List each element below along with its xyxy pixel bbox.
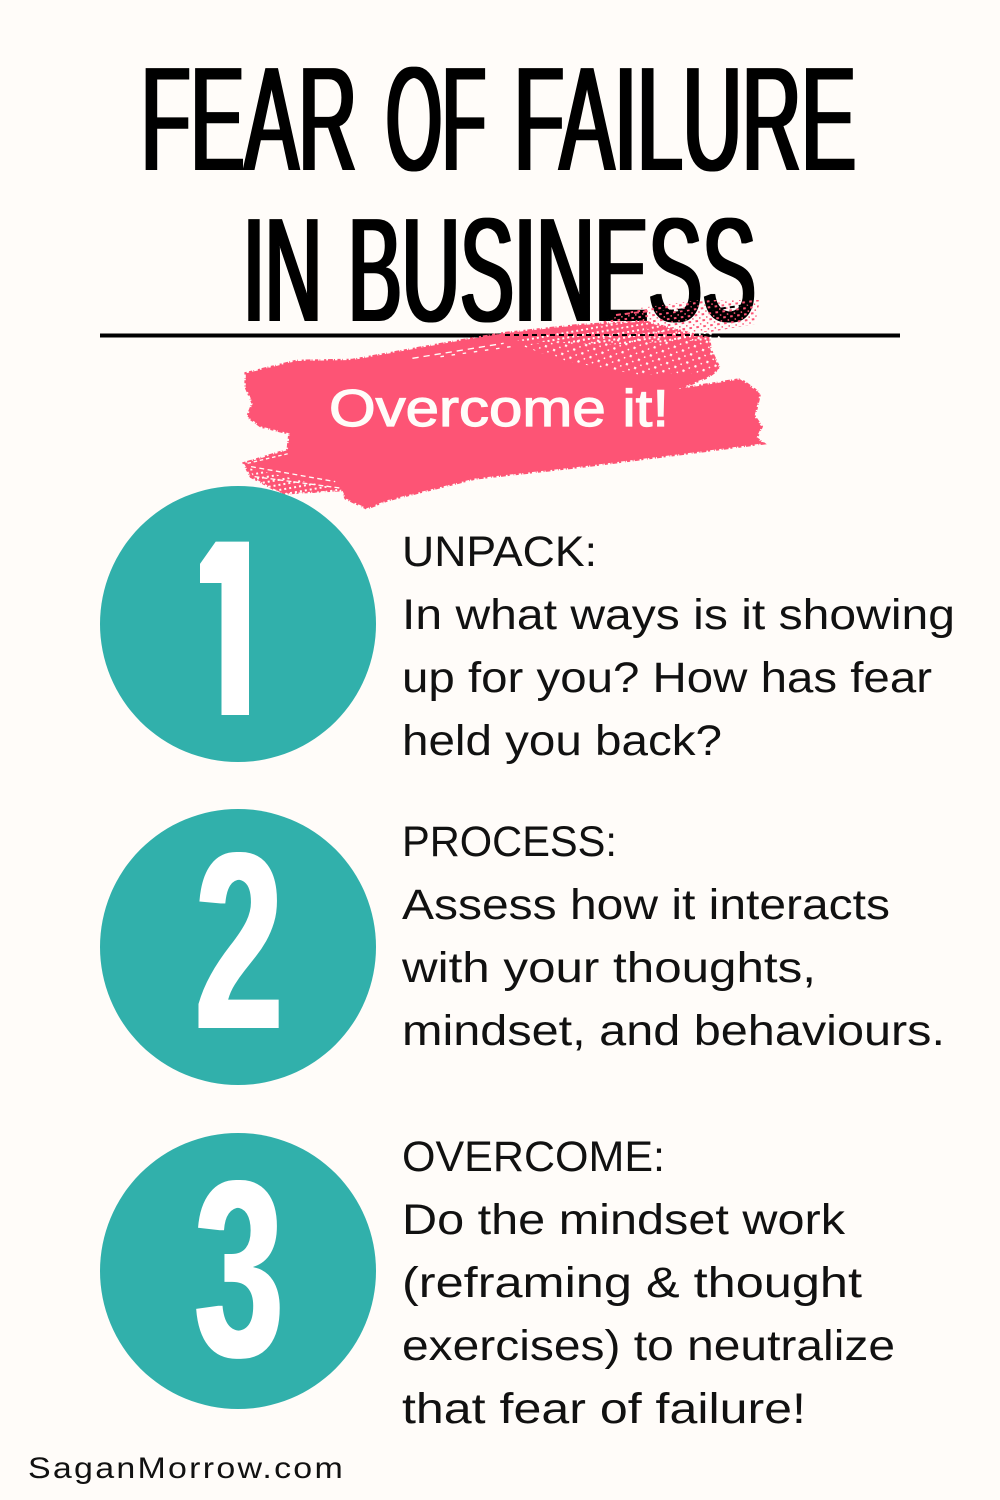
step 2 number circle: 2	[195, 801, 283, 1082]
brush label: Overcome it!	[329, 380, 669, 438]
brush speckle	[520, 325, 724, 375]
step 1 text: held you back?	[402, 717, 722, 765]
step 1 text: UNPACK:	[402, 528, 597, 576]
step 2 text: with your thoughts,	[401, 944, 816, 992]
step 3 number circle	[100, 1129, 376, 1410]
title: OF	[386, 37, 486, 202]
step 2 text: PROCESS:	[402, 818, 617, 866]
step 2 number circle	[100, 801, 376, 1085]
step 2 text	[401, 818, 945, 1055]
title: IN	[243, 188, 322, 353]
step 2 text: mindset, and behaviours.	[402, 1007, 945, 1055]
step 1 text	[402, 528, 955, 765]
step 2 text: Assess how it interacts	[402, 881, 890, 929]
step 1 text: In what ways is it showing	[402, 591, 955, 639]
title	[141, 37, 856, 353]
step 3 text	[402, 1133, 895, 1433]
step 3 number circle: 3	[194, 1129, 284, 1410]
step 3 text: OVERCOME:	[402, 1133, 665, 1181]
step 3 text: that fear of failure!	[402, 1385, 806, 1433]
step 3 text: Do the mindset work	[402, 1196, 846, 1244]
step 3 text: exercises) to neutralize	[402, 1322, 895, 1370]
step 1 number circle	[100, 486, 376, 769]
step 1 text: up for you? How has fear	[402, 654, 932, 702]
pink brush stroke	[244, 300, 763, 508]
footer website: SaganMorrow.com	[28, 1452, 345, 1485]
step 1 number circle: 1	[198, 488, 262, 769]
step 3 text: (reframing & thought	[402, 1259, 862, 1307]
title: FEAR	[141, 37, 357, 202]
